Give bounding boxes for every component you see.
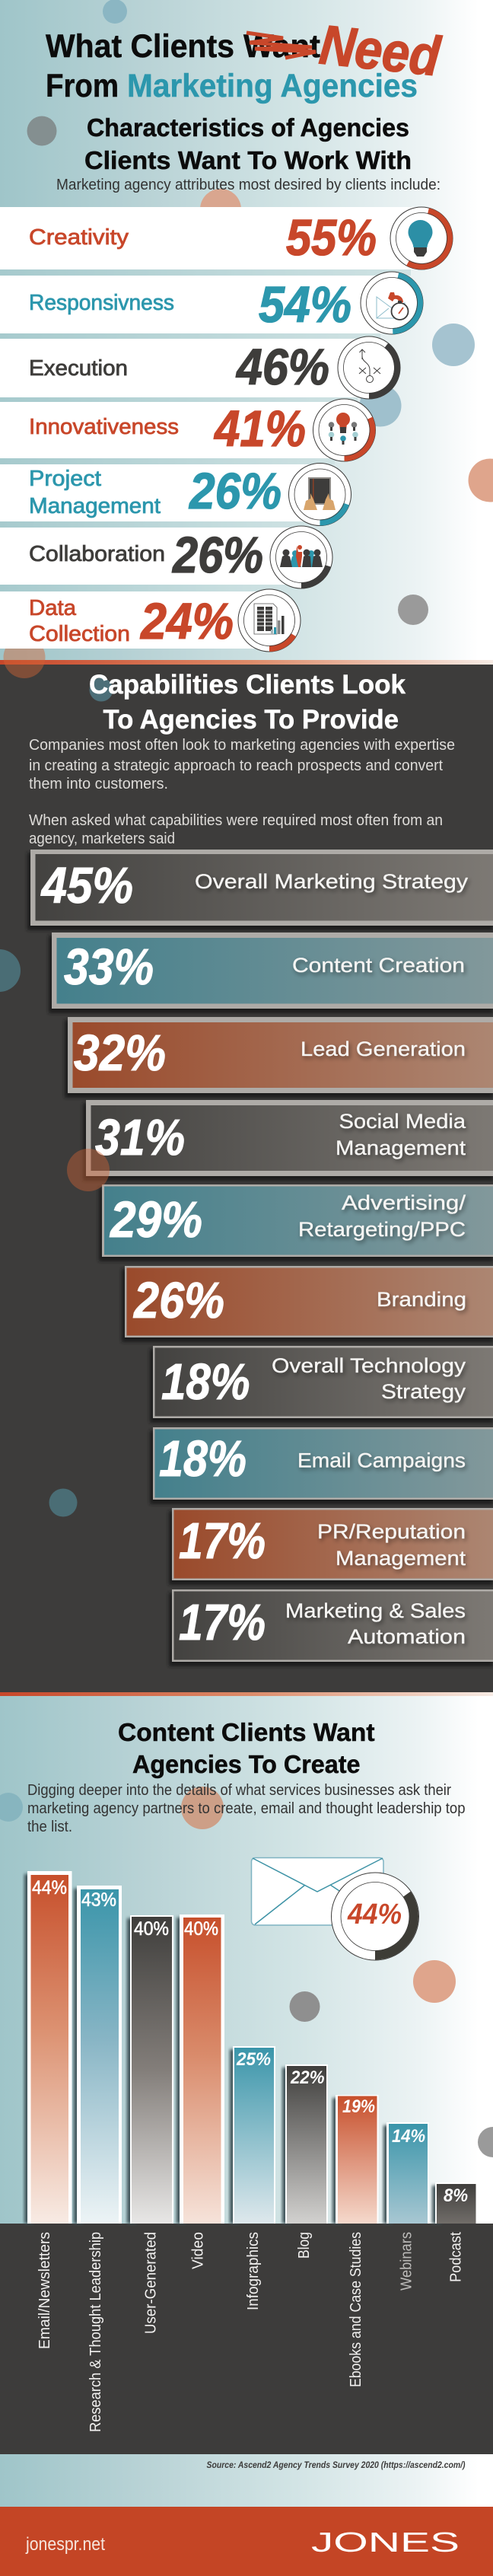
bar: research and thought leadership 43% — [74, 1886, 122, 2224]
capability bar: branding: 26% — [132, 1272, 224, 1329]
capability bar: overall marketing strategy: Overall Marketing Strategy — [195, 870, 469, 893]
capabilities intro text: agency, marketers said — [29, 831, 175, 847]
row: innovativeness: Innovativeness — [29, 415, 179, 439]
capability bar: social media management: Social Media — [339, 1110, 466, 1133]
heading: content — [118, 1718, 375, 1778]
capability bar: lead generation: 32% — [74, 1025, 166, 1082]
footer — [25, 2527, 460, 2558]
heading: capabilities: To Agencies To Provide — [103, 705, 399, 735]
capability bar: content creation — [49, 933, 493, 1013]
bar: infographics 25%: 25% — [236, 2049, 271, 2070]
bar: video 40%: 40% — [184, 1918, 218, 1940]
icon: envelope and stopwatch — [377, 292, 408, 320]
heading: capabilities — [89, 670, 406, 735]
capability bar: advertising: Advertising/ — [342, 1191, 466, 1214]
bar: blog 22% — [282, 2064, 328, 2224]
row: project management: Project — [29, 467, 101, 491]
row: data collection — [0, 582, 308, 659]
icon: team of people — [280, 545, 323, 567]
row: creativity: 55% — [286, 209, 377, 266]
intro text: Marketing agency attributes most desired by clients include: — [56, 177, 441, 193]
icon: data document — [254, 604, 285, 634]
bar: blog 22%: 22% — [290, 2067, 324, 2088]
capability bar: pr and reputation: Management — [336, 1547, 466, 1570]
decorative dots, third section — [0, 1787, 493, 2157]
category labels: Webinars — [399, 2232, 415, 2291]
title: Marketing Agencies — [127, 68, 418, 104]
bar: podcast 8%: 8% — [444, 2185, 468, 2206]
category labels: Infographics — [245, 2232, 262, 2310]
content intro text — [27, 1782, 466, 1835]
decorative dots, first and second sections — [0, 0, 493, 1516]
title: Want — [243, 28, 320, 65]
content intro text: the list. — [27, 1819, 72, 1835]
bar: email/newsletters 44%: 44% — [32, 1877, 67, 1899]
capability bar: overall technology strategy — [150, 1346, 493, 1423]
footer: JONES — [311, 2527, 460, 2558]
category labels: Video — [190, 2232, 207, 2269]
bar: webinars 14%: 14% — [392, 2126, 425, 2147]
capability bar: branding: Branding — [377, 1288, 466, 1311]
capability bar: overall technology strategy: Strategy — [381, 1380, 466, 1403]
translucent dot over social media bar — [67, 1149, 110, 1191]
capability bar: overall technology strategy: 18% — [161, 1353, 250, 1411]
bar: podcast 8% — [432, 2182, 477, 2224]
capability bar: advertising: 29% — [109, 1191, 202, 1248]
title: What Clients — [46, 28, 234, 65]
bar chart: content types — [24, 1871, 477, 2224]
content intro text: marketing agency partners to create, email and thought leadership top — [27, 1800, 466, 1817]
row: data collection: Data — [29, 596, 77, 620]
row: innovativeness — [0, 393, 382, 467]
bar: infographics 25% — [230, 2046, 275, 2224]
category labels: Blog — [296, 2232, 313, 2259]
heading: capabilities: Capabilities Clients Look — [89, 670, 406, 700]
capability bar: marketing and sales automation: Marketing & Sales — [285, 1599, 466, 1622]
category labels: Research & Thought Leadership — [87, 2232, 104, 2432]
capability bar: email campaigns — [150, 1427, 493, 1504]
capability bar: marketing and sales automation: Automation — [348, 1625, 466, 1648]
row: execution: Execution — [29, 356, 128, 381]
capabilities intro text — [29, 737, 455, 847]
capability bar: email campaigns: 18% — [159, 1430, 247, 1487]
bar: ebooks and case studies 19% — [332, 2095, 379, 2224]
row: collaboration: 26% — [171, 527, 263, 584]
row: execution: 46% — [235, 339, 329, 396]
category labels: Podcast — [447, 2232, 464, 2282]
row: responsiveness: 54% — [259, 276, 351, 333]
row: collaboration — [0, 521, 337, 593]
capabilities intro text: Companies most often look to marketing agencies with expertise — [29, 737, 455, 754]
heading: characteristics: Clients Want To Work With — [84, 146, 412, 174]
capability bar: lead generation — [65, 1017, 493, 1098]
capabilities intro text: When asked what capabilities were required most often from an — [29, 812, 443, 829]
row: innovativeness: 41% — [213, 400, 306, 457]
capabilities intro text: in creating a strategic approach to reach prospects and convert — [29, 757, 443, 774]
category labels: User-Generated — [143, 2232, 160, 2334]
capability bar: content creation: Content Creation — [292, 954, 465, 977]
category labels: Ebooks and Case Studies — [348, 2232, 364, 2387]
capabilities intro text: them into customers. — [29, 776, 168, 792]
title: From — [46, 68, 119, 104]
icon: play diagram — [359, 349, 380, 382]
capability bar: overall marketing strategy — [27, 850, 493, 930]
capability bar: content creation: 33% — [64, 939, 154, 996]
category labels — [37, 2232, 464, 2432]
capability bar: lead generation: Lead Generation — [301, 1038, 466, 1060]
bar: email/newsletters 44% — [24, 1871, 72, 2224]
capability bar: advertising — [99, 1184, 493, 1261]
scribble over Want — [247, 33, 316, 58]
heading: content: Content Clients Want — [118, 1718, 375, 1746]
row: collaboration: Collaboration — [29, 542, 165, 566]
row: project management: Management — [29, 494, 161, 518]
row divider strips — [0, 269, 411, 591]
capability bar: marketing and sales automation — [169, 1589, 493, 1666]
icon: envelope with 44 percent ring — [251, 1857, 429, 1971]
icon: lightbulb — [408, 220, 432, 257]
row: creativity — [0, 204, 456, 273]
footer: jonespr.net — [25, 2534, 105, 2555]
capability bar: overall technology strategy: Overall Technology — [272, 1354, 466, 1377]
bar: user-generated 40% — [127, 1915, 173, 2224]
icon: tablet in hands — [304, 477, 336, 510]
row: responsiveness: Responsivness — [29, 291, 174, 315]
capability bar: email campaigns: Email Campaigns — [297, 1449, 466, 1472]
title — [46, 14, 444, 104]
bar: research and thought leadership 43%: 43% — [81, 1889, 116, 1911]
row: project management — [0, 458, 356, 531]
title: Need — [316, 14, 444, 88]
content intro text: Digging deeper into the details of what services businesses ask their — [27, 1782, 451, 1799]
bar: video 40% — [177, 1914, 224, 2224]
capability bar: pr and reputation: 17% — [179, 1513, 266, 1570]
heading: characteristics: Characteristics of Agencies — [87, 113, 409, 142]
bar: webinars 14% — [383, 2122, 429, 2224]
icon: group of bulbs — [329, 413, 358, 445]
row: data collection: 24% — [139, 593, 234, 650]
capability bar: pr and reputation: PR/Reputation — [317, 1520, 466, 1543]
heading: content: Agencies To Create — [132, 1750, 361, 1778]
capability bar: social media management — [83, 1100, 493, 1181]
capability bar: social media management: Management — [336, 1137, 466, 1159]
capability bar: social media management: 31% — [95, 1109, 185, 1166]
row: creativity: Creativity — [29, 225, 129, 250]
heading: characteristics — [84, 113, 412, 174]
bar: user-generated 40%: 40% — [134, 1918, 169, 1940]
capability bar: branding — [122, 1266, 493, 1342]
row: responsiveness — [0, 269, 425, 336]
category labels: Email/Newsletters — [37, 2232, 53, 2349]
bar: ebooks and case studies 19%: 19% — [342, 2096, 375, 2117]
row: execution — [0, 328, 409, 407]
row: data collection: Collection — [29, 622, 130, 646]
capability bar: advertising: Retargeting/PPC — [298, 1218, 466, 1241]
capability bar: marketing and sales automation: 17% — [179, 1594, 266, 1651]
capability bar: pr and reputation — [169, 1508, 493, 1585]
capability bar: overall marketing strategy: 45% — [40, 857, 133, 914]
icon: envelope with 44 percent ring: 44% — [347, 1899, 402, 1930]
row: project management: 26% — [188, 463, 281, 520]
